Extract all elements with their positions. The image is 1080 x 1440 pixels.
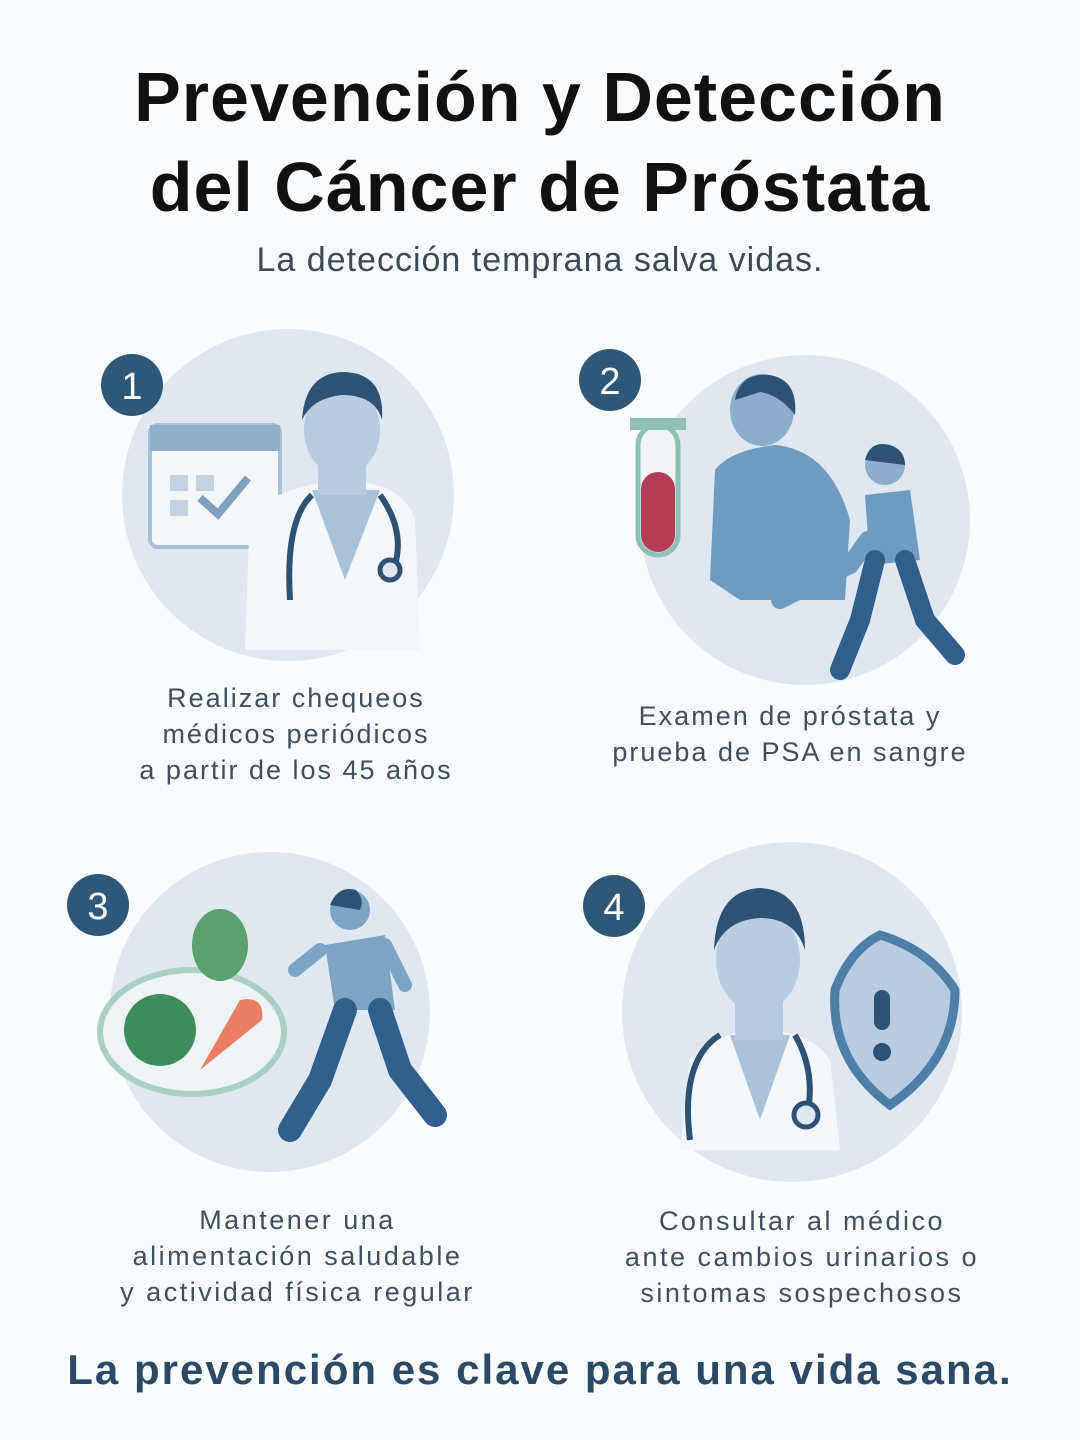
subtitle: La detección temprana salva vidas. (256, 241, 823, 279)
badge 3: 3 (87, 886, 109, 928)
caption 2 (612, 701, 968, 767)
footer tagline: La prevención es clave para una vida sana. (67, 1346, 1013, 1393)
title: Prevención y Detección (134, 58, 946, 136)
caption 3: y actividad física regular (120, 1277, 475, 1307)
caption 3 (120, 1205, 475, 1307)
caption 4: Consultar al médico (659, 1206, 945, 1236)
caption 1: Realizar chequeos (167, 683, 425, 713)
caption 3: Mantener una (199, 1205, 396, 1235)
caption 1: médicos periódicos (162, 719, 430, 749)
title (134, 58, 946, 226)
badge 2 (579, 349, 641, 411)
caption 4 (625, 1206, 979, 1308)
panel 1 illustration: calendar and doctor (122, 329, 454, 661)
caption 4: ante cambios urinarios o (625, 1242, 979, 1272)
panel 2 illustration: test tube, man and boy (630, 355, 970, 685)
caption 3: alimentación saludable (133, 1241, 462, 1271)
caption 1: a partir de los 45 años (139, 755, 453, 785)
caption 2: Examen de próstata y (639, 701, 941, 731)
caption 2: prueba de PSA en sangre (612, 737, 968, 767)
badge 2: 2 (599, 361, 621, 403)
badge 3 (67, 874, 129, 936)
badge 4 (583, 875, 645, 937)
panel 3 illustration: plate of vegetables and runner (100, 852, 435, 1172)
badge 4: 4 (603, 887, 625, 929)
title: del Cáncer de Próstata (150, 148, 930, 226)
badge 1: 1 (121, 366, 143, 408)
badge 1 (101, 354, 163, 416)
caption 4: sintomas sospechosos (640, 1278, 964, 1308)
panel 4 illustration: doctor and warning shield (622, 842, 962, 1182)
caption 1 (139, 683, 453, 785)
